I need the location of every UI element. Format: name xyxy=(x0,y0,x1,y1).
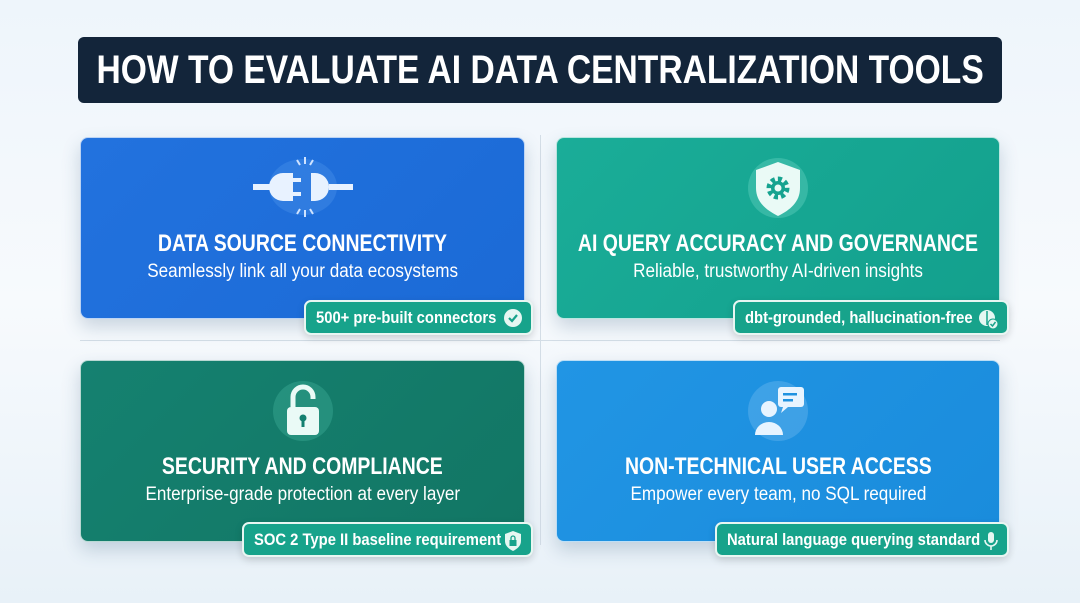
badge: natural language xyxy=(715,522,1009,557)
badge: connectors xyxy=(304,300,533,335)
subtitle: Enterprise-grade protection at every layer xyxy=(145,484,460,505)
badge: dbt xyxy=(733,300,1009,335)
badge: dbt: dbt-grounded, hallucination-free xyxy=(745,308,973,327)
title xyxy=(78,37,1002,103)
badge: SOC 2 xyxy=(242,522,533,557)
panel: security xyxy=(80,360,525,542)
subtitle: Seamlessly link all your data ecosystems xyxy=(147,261,458,282)
subtitle: Reliable, trustworthy AI-driven insights xyxy=(633,261,923,282)
heading: SECURITY AND COMPLIANCE xyxy=(162,453,443,480)
badge: SOC 2: SOC 2 Type II baseline requirement xyxy=(254,530,501,549)
badge: connectors: 500+ pre-built connectors xyxy=(316,308,496,327)
panel: data source connectivity xyxy=(80,137,525,319)
icon: padlock xyxy=(273,381,333,441)
icon: plug xyxy=(253,157,353,217)
title: HOW TO EVALUATE AI DATA CENTRALIZATION TOOLS xyxy=(96,48,984,92)
heading: NON-TECHNICAL USER ACCESS xyxy=(625,453,931,480)
panel: non-technical access xyxy=(556,360,1000,542)
badge: natural language: Natural language querying standard xyxy=(727,530,980,549)
icon: shield gear xyxy=(748,158,808,218)
heading: DATA SOURCE CONNECTIVITY xyxy=(158,230,447,257)
panel: AI query accuracy xyxy=(556,137,1000,319)
icon: user chat xyxy=(748,381,808,441)
heading: AI QUERY ACCURACY AND GOVERNANCE xyxy=(578,230,978,257)
subtitle: Empower every team, no SQL required xyxy=(630,484,926,505)
